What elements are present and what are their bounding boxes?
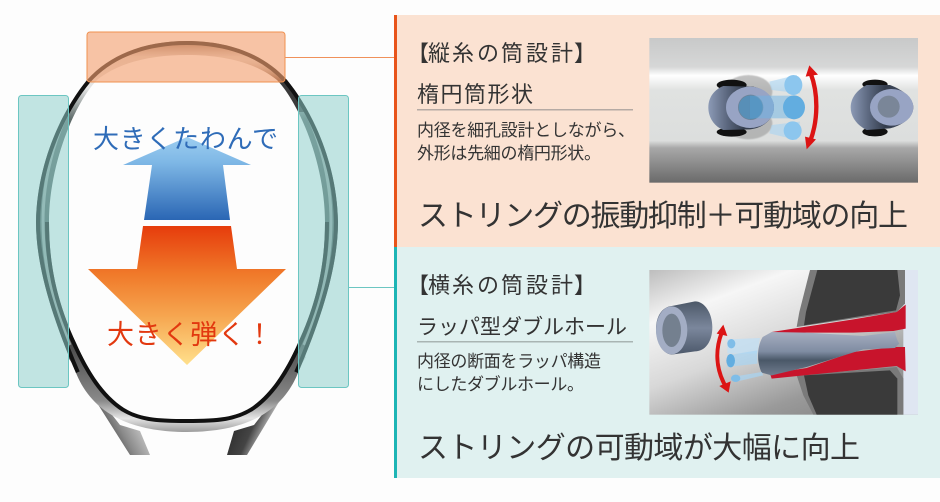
image: elliptical grommet diagram	[649, 38, 918, 183]
icon: red double arrow	[805, 65, 818, 149]
label: bend: 大きくたわんで	[93, 124, 278, 154]
icon: red double arrow	[717, 325, 731, 393]
description: 内径の断面をラッパ構造	[417, 352, 601, 371]
panel: vertical string	[394, 15, 940, 247]
conclusion: horizontal: ストリングの可動域が大幅に向上	[418, 432, 860, 465]
down arrow	[88, 226, 286, 365]
description: 内径を細孔設計としながら、	[417, 121, 635, 140]
callout box: left	[18, 96, 68, 388]
racket frame	[30, 35, 344, 455]
description: にしたダブルホール。	[417, 374, 584, 394]
conclusion: vertical: ストリングの振動抑制＋可動域の向上	[418, 200, 908, 233]
subheading: trumpet double hole: ラッパ型ダブルホール	[417, 316, 627, 339]
description: 外形は先細の楕円形状。	[417, 144, 601, 163]
callout box: top	[87, 32, 285, 82]
label: rebound: 大きく弾く！	[107, 320, 273, 350]
up arrow	[123, 137, 251, 220]
racket hoop	[30, 35, 344, 435]
connector: top	[285, 57, 395, 58]
panel: horizontal string	[394, 247, 940, 478]
image: trumpet double hole diagram	[649, 270, 918, 415]
callout box: right	[298, 96, 348, 388]
heading: vertical string grommet: 【縦糸の筒設計】	[407, 41, 596, 66]
heading: horizontal string grommet: 【横糸の筒設計】	[407, 273, 596, 298]
connector: right	[348, 287, 395, 288]
racket throat	[68, 350, 306, 455]
subheading: elliptical shape: 楕円筒形状	[417, 82, 533, 107]
